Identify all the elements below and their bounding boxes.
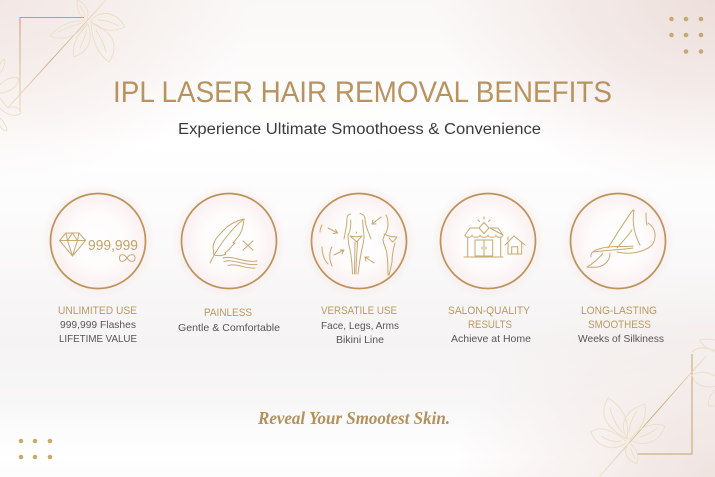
text: unlimited use: 999,999 Flashes <box>60 319 136 331</box>
text: salon-quality results: RESULTS <box>468 319 512 331</box>
icon: infinity <box>120 255 135 261</box>
decoration: top-right dots <box>669 17 703 54</box>
text: painless: PAINLESS <box>204 307 252 319</box>
text: unlimited use <box>58 305 137 345</box>
flash count: 999,999 <box>88 237 138 254</box>
text: long-lasting smoothness <box>578 305 664 345</box>
tagline: Reveal Your Smootest Skin. <box>257 408 450 428</box>
text: painless <box>178 307 280 334</box>
icon: leg <box>587 210 655 267</box>
text: salon-quality results: SALON-QUALITY <box>448 305 531 317</box>
icon: feather, cross and waves <box>210 219 257 268</box>
text: salon-quality results: Achieve at Home <box>451 333 531 345</box>
benefit: unlimited use <box>40 183 156 345</box>
text: long-lasting smoothness: Weeks of Silkiness <box>578 333 664 345</box>
decoration: bottom-left dots <box>19 439 52 459</box>
decoration: top-left flower and gold frame <box>0 0 125 131</box>
benefit: long-lasting smoothness <box>560 183 676 345</box>
text: unlimited use: UNLIMITED USE <box>58 305 137 317</box>
text: versatile use: VERSATILE USE <box>321 305 397 317</box>
icon: diamond <box>60 233 86 256</box>
text: long-lasting smoothness: SMOOTHESS <box>588 319 651 331</box>
subtitle: Experience Ultimate Smoothoess & Convenience <box>178 121 541 138</box>
text: versatile use: Face, Legs, Arms <box>321 320 399 332</box>
decoration: bottom-right flower and gold frame <box>591 339 715 477</box>
text: versatile use: Bikini Line <box>336 334 384 346</box>
title: IPL LASER HAIR REMOVAL BENEFITS <box>113 76 612 109</box>
text: unlimited use: LIFETIME VALUE <box>59 333 137 345</box>
benefit: painless <box>171 183 287 334</box>
icon: salon and home <box>464 217 525 257</box>
text: long-lasting smoothness: LONG-LASTING <box>581 305 657 317</box>
text: salon-quality results <box>448 305 531 345</box>
benefit: versatile use <box>301 183 417 346</box>
icon: body with arrows <box>320 214 397 275</box>
benefit: salon-quality results <box>430 183 546 345</box>
text: versatile use <box>321 305 399 346</box>
text: painless: Gentle & Comfortable <box>178 322 280 334</box>
